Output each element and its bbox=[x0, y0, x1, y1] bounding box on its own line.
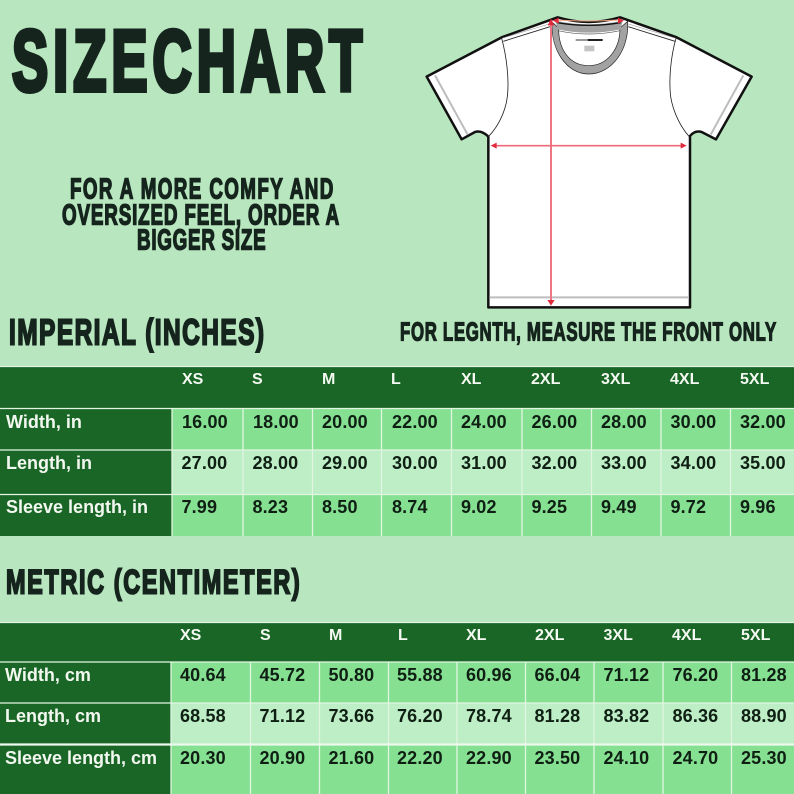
metric length row: 76.20 bbox=[397, 706, 443, 726]
imperial length row: Length, in bbox=[6, 453, 92, 473]
text block: sizing advice: OVERSIZED FEEL, ORDER A bbox=[62, 200, 339, 232]
metric width row: 45.72 bbox=[260, 665, 305, 685]
metric length row: 68.58 bbox=[180, 706, 226, 726]
metric width row: 66.04 bbox=[534, 665, 580, 685]
metric header row: 3XL bbox=[604, 627, 633, 644]
imperial length row: 31.00 bbox=[461, 453, 507, 473]
metric width row: 60.96 bbox=[466, 665, 512, 685]
title: SIZECHART bbox=[12, 14, 362, 110]
imperial length row: 35.00 bbox=[740, 453, 786, 473]
metric header row: 2XL bbox=[535, 627, 565, 644]
metric sleeve length row: 22.90 bbox=[466, 748, 512, 768]
metric header row: XS bbox=[180, 627, 202, 644]
metric sleeve length row: 24.10 bbox=[604, 748, 649, 768]
metric width row: 76.20 bbox=[672, 665, 718, 685]
imperial width row: 28.00 bbox=[601, 412, 647, 432]
metric width row: 71.12 bbox=[604, 665, 649, 685]
imperial width row: 16.00 bbox=[182, 412, 228, 432]
imperial header row: 4XL bbox=[670, 371, 700, 388]
metric sleeve length row: 22.20 bbox=[397, 748, 443, 768]
metric length row: 83.82 bbox=[604, 706, 649, 726]
imperial width row: 18.00 bbox=[253, 412, 299, 432]
metric sleeve length row: 24.70 bbox=[672, 748, 718, 768]
t-shirt outline bbox=[427, 17, 752, 307]
illustration: t-shirt with measurement arrows bbox=[427, 17, 752, 307]
metric sleeve length row: 23.50 bbox=[534, 748, 580, 768]
metric sleeve length row bbox=[5, 748, 787, 768]
text block: sizing advice bbox=[62, 174, 339, 257]
metric width row: Width, cm bbox=[5, 665, 91, 685]
text block: sizing advice: BIGGER SIZE bbox=[137, 225, 266, 257]
imperial width row: 32.00 bbox=[740, 412, 786, 432]
imperial sleeve length row: Sleeve length, in bbox=[6, 497, 148, 517]
imperial header row: 5XL bbox=[740, 371, 770, 388]
heading: imperial: IMPERIAL (INCHES) bbox=[9, 312, 264, 353]
imperial length row: 29.00 bbox=[322, 453, 368, 473]
metric width row: 81.28 bbox=[741, 665, 787, 685]
imperial sleeve length row: 9.72 bbox=[670, 497, 706, 517]
imperial length row: 33.00 bbox=[601, 453, 647, 473]
imperial header row: M bbox=[322, 371, 335, 388]
imperial header row: XL bbox=[461, 371, 482, 388]
imperial sleeve length row: 9.25 bbox=[532, 497, 567, 517]
imperial sleeve length row: 7.99 bbox=[182, 497, 217, 517]
heading: metric: METRIC (CENTIMETER) bbox=[6, 563, 300, 602]
imperial sleeve length row: 8.23 bbox=[252, 497, 288, 517]
cuffs and hem stitching bbox=[435, 75, 743, 297]
imperial width row bbox=[6, 412, 786, 432]
metric sleeve length row: 25.30 bbox=[741, 748, 787, 768]
imperial header row: 3XL bbox=[601, 371, 631, 388]
text block: sizing advice: FOR A MORE COMFY AND bbox=[70, 174, 333, 206]
metric sleeve length row: Sleeve length, cm bbox=[5, 748, 157, 768]
metric header row: S bbox=[260, 627, 271, 644]
imperial sleeve length row: 8.50 bbox=[322, 497, 358, 517]
imperial width row: 30.00 bbox=[670, 412, 716, 432]
metric width row: 55.88 bbox=[397, 665, 443, 685]
metric length row bbox=[5, 706, 787, 726]
metric header row bbox=[180, 627, 771, 644]
metric length row: 71.12 bbox=[260, 706, 305, 726]
metric header row: 4XL bbox=[672, 627, 702, 644]
imperial header row: L bbox=[391, 371, 401, 388]
sleeve seams bbox=[488, 24, 689, 137]
metric header row: M bbox=[329, 627, 342, 644]
table: metric sizes bbox=[0, 622, 794, 794]
imperial width row: 26.00 bbox=[532, 412, 577, 432]
metric width row: 40.64 bbox=[180, 665, 226, 685]
neck label bbox=[576, 39, 603, 51]
metric width row bbox=[5, 665, 787, 685]
imperial length row: 34.00 bbox=[670, 453, 716, 473]
metric length row: 73.66 bbox=[328, 706, 374, 726]
imperial header row: 2XL bbox=[531, 371, 561, 388]
imperial length row: 32.00 bbox=[532, 453, 577, 473]
metric sleeve length row: 21.60 bbox=[328, 748, 374, 768]
imperial sleeve length row: 9.96 bbox=[740, 497, 776, 517]
metric header row: L bbox=[398, 627, 408, 644]
imperial width row: Width, in bbox=[6, 412, 82, 432]
collar bbox=[552, 21, 628, 74]
metric length row: 86.36 bbox=[672, 706, 718, 726]
imperial length row bbox=[6, 453, 786, 473]
imperial header row: S bbox=[252, 371, 263, 388]
imperial length row: 30.00 bbox=[392, 453, 438, 473]
imperial header row: XS bbox=[182, 371, 204, 388]
imperial sleeve length row: 9.02 bbox=[461, 497, 497, 517]
metric header row: 5XL bbox=[741, 627, 771, 644]
metric header row: XL bbox=[466, 627, 487, 644]
table: imperial sizes bbox=[0, 366, 794, 536]
imperial sleeve length row: 8.74 bbox=[392, 497, 428, 517]
imperial sleeve length row: 9.49 bbox=[601, 497, 637, 517]
back collar bbox=[555, 21, 623, 33]
imperial sleeve length row bbox=[6, 497, 776, 517]
metric length row: 78.74 bbox=[466, 706, 512, 726]
imperial width row: 22.00 bbox=[392, 412, 438, 432]
metric length row: 88.90 bbox=[741, 706, 787, 726]
imperial length row: 28.00 bbox=[252, 453, 298, 473]
metric sleeve length row: 20.90 bbox=[260, 748, 305, 768]
metric width row: 50.80 bbox=[328, 665, 374, 685]
imperial width row: 20.00 bbox=[322, 412, 368, 432]
metric sleeve length row: 20.30 bbox=[180, 748, 226, 768]
imperial header row bbox=[182, 371, 770, 388]
note: length measurement: FOR LEGNTH, MEASURE THE FRONT ONLY bbox=[400, 317, 777, 346]
imperial length row: 27.00 bbox=[182, 453, 227, 473]
width and length arrows bbox=[491, 18, 687, 306]
metric length row: Length, cm bbox=[5, 706, 101, 726]
imperial width row: 24.00 bbox=[461, 412, 507, 432]
metric length row: 81.28 bbox=[534, 706, 580, 726]
